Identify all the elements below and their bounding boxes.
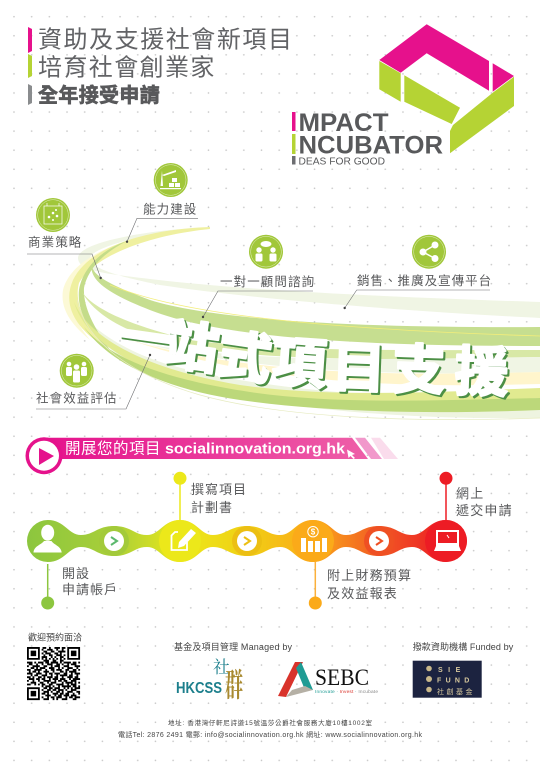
footer: QR code block: 歡迎預約面洽 (28, 632, 82, 642)
logo: HKCSS: 群 (225, 660, 243, 706)
callout: social impact evaluation (36, 354, 151, 409)
callout: social impact evaluation: 社會效益評估 (36, 390, 118, 406)
step: stem and label, submit online: 網上 (456, 486, 484, 501)
callout: one-on-one consulting (202, 235, 315, 318)
footer: contact details: 地址: 香港灣仔軒尼詩道15號溫莎公爵社會服務大廈10樓1002室 (168, 718, 372, 727)
logo: HKCSS: HKCSS (176, 680, 222, 697)
icon: coin and bars (301, 526, 327, 552)
footer: funded by (413, 641, 514, 698)
step: stem and label, write proposal: 撰寫項目 (191, 482, 247, 497)
heading: one-stop project support: 站 (161, 315, 222, 382)
step: stem and label, budget (309, 562, 412, 610)
process flow: five application steps (27, 520, 467, 562)
callout: sales and promotion platform (344, 235, 492, 309)
footer: funded by: 撥款資助機構 Funded by (413, 641, 514, 652)
callout: sales and promotion platform: 銷售、推廣及宣傳平台 (357, 273, 492, 288)
step: stem and label, submit online (440, 472, 513, 520)
footer: contact details (118, 718, 422, 739)
heading: title block: 培育社會創業家 (38, 54, 216, 82)
callout: one-on-one consulting: 一對一顧問諮詢 (220, 274, 315, 289)
logo: SIE Fund: FUND (437, 678, 474, 684)
banner: start your project (26, 437, 398, 474)
icon: laptop (434, 530, 461, 551)
logo: SIE Fund (413, 661, 482, 698)
logo: SEBC: SEBC (315, 665, 369, 690)
icon: coin and bars: $ (311, 528, 316, 537)
banner: start your project: 開展您的項目 (65, 440, 161, 458)
step: stem and label, submit online: 遞交申請 (456, 503, 513, 518)
logo: Impact Incubator (292, 24, 514, 167)
heading: title block (28, 26, 294, 107)
heading: one-stop project support: 一 (115, 306, 176, 373)
logo: Impact Incubator: DEAS FOR GOOD (298, 156, 385, 168)
heading: one-stop project support: 支 (391, 340, 447, 402)
logo: HKCSS (176, 653, 243, 706)
icon: person (34, 525, 62, 552)
heading: one-stop project support: 目 (331, 338, 387, 400)
heading: one-stop project support (115, 306, 510, 404)
logo: Impact Incubator: NCUBATOR (298, 132, 443, 159)
footer: managed by (174, 641, 378, 706)
callout: business strategy: 商業策略 (28, 234, 82, 250)
step: stem and label, write proposal (174, 472, 247, 520)
step: stem and label, budget: 及效益報表 (327, 586, 398, 601)
heading: title block: 資助及支援社會新項目 (38, 26, 294, 54)
callout: capacity building: 能力建設 (143, 202, 197, 216)
footer: managed by: 基金及項目管理 Managed by (174, 641, 292, 652)
logo: SIE Fund: SIE (438, 667, 466, 674)
logo: SIE Fund: 社創基金 (437, 687, 475, 696)
heading: one-stop project support: 援 (454, 342, 510, 404)
logo: Impact Incubator: MPACT (298, 110, 388, 137)
callout: capacity building (126, 163, 198, 243)
heading: title block: 全年接受申請 (38, 84, 160, 107)
footer: QR code block (27, 632, 82, 700)
icon: document and pencil (172, 529, 196, 550)
QR code (27, 647, 80, 700)
logo: SEBC: Innovate · Invest · Incubate (315, 689, 378, 695)
heading: one-stop project support: 項 (270, 332, 328, 396)
logo: HKCSS: 社 (213, 653, 230, 678)
footer: contact details: 電話Tel: 2876 2491 電郵: info@socialinnovation.org.hk 網址: www.socialinnovation.org.hk (118, 730, 422, 739)
logo: SEBC (278, 662, 378, 697)
banner: start your project: socialinnovation.org.hk (165, 440, 346, 458)
step: stem and label, open account: 開設 (62, 566, 90, 581)
step: stem and label, open account: 申請帳戶 (62, 582, 118, 597)
step: stem and label, write proposal: 計劃書 (191, 500, 233, 515)
step: stem and label, budget: 附上財務預算 (327, 568, 412, 583)
step: stem and label, open account (41, 564, 118, 610)
callout: business strategy (27, 198, 102, 279)
heading: one-stop project support: 式 (214, 325, 275, 392)
graphic: green swoosh bands (63, 227, 540, 420)
